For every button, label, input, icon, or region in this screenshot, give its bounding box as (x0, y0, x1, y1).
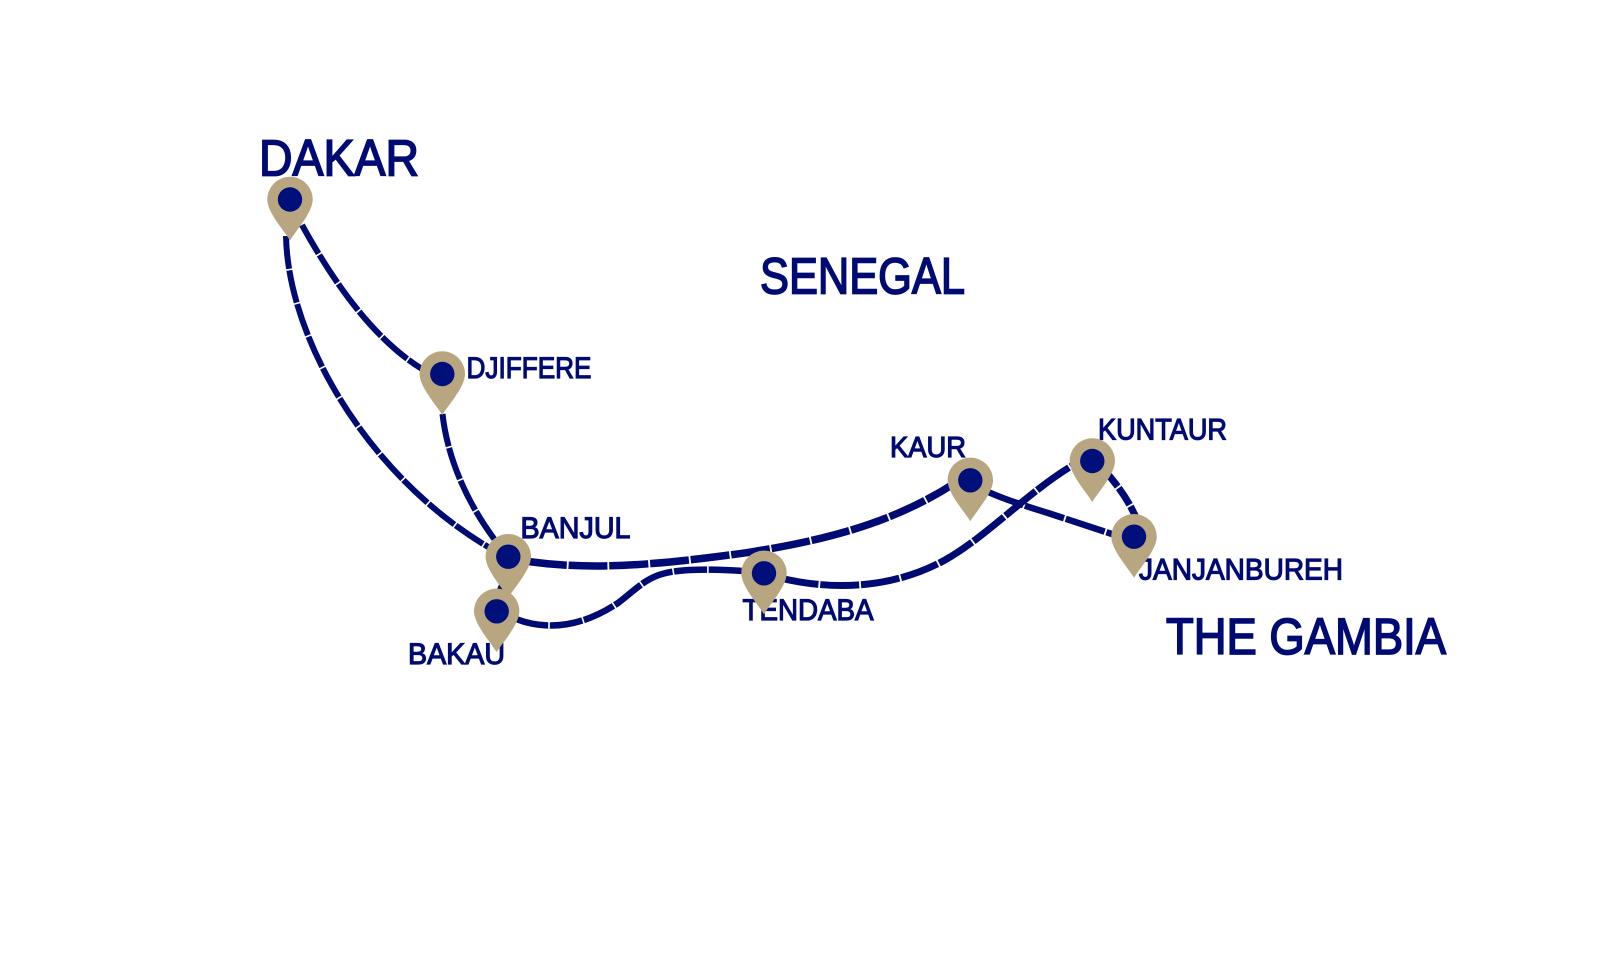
pin: Dakar (267, 177, 313, 240)
route: Dakar to Banjul (286, 236, 495, 551)
route: Tendaba to Kuntaur (780, 464, 1075, 585)
route: Banjul to Kaur (528, 483, 955, 566)
label: KAUR: KAUR (890, 432, 966, 464)
label: BANJUL: BANJUL (520, 512, 630, 545)
route: Dakar to Djiffere (302, 225, 422, 369)
pin: Banjul (486, 534, 531, 598)
pin: Djiffere (420, 351, 465, 415)
route: Kaur to Janjanbureh (985, 490, 1118, 536)
label: TENDABA: TENDABA (742, 594, 874, 627)
pin: Kaur (948, 458, 993, 521)
label: DJIFFERE: DJIFFERE (466, 352, 592, 385)
place labels (259, 130, 1446, 671)
route: Bakau to Tendaba (516, 570, 750, 626)
pin: Janjanbureh (1111, 514, 1157, 578)
route: Banjul to Bakau (496, 570, 508, 600)
location pins (267, 177, 1157, 652)
pin: Bakau (474, 589, 519, 652)
label: KUNTAUR: KUNTAUR (1098, 414, 1227, 446)
route: Djiffere to Banjul (442, 414, 495, 540)
label: JANJANBUREH: JANJANBUREH (1139, 554, 1343, 586)
route lines (286, 225, 1137, 626)
pin: Tendaba (741, 551, 787, 614)
route: Kuntaur to Janjanbureh (1105, 471, 1137, 520)
pin: Kuntaur (1070, 438, 1115, 502)
label: BAKAU: BAKAU (408, 638, 505, 671)
label: THE GAMBIA: THE GAMBIA (1166, 608, 1446, 665)
label: SENEGAL: SENEGAL (760, 248, 965, 304)
label: DAKAR: DAKAR (259, 130, 419, 186)
